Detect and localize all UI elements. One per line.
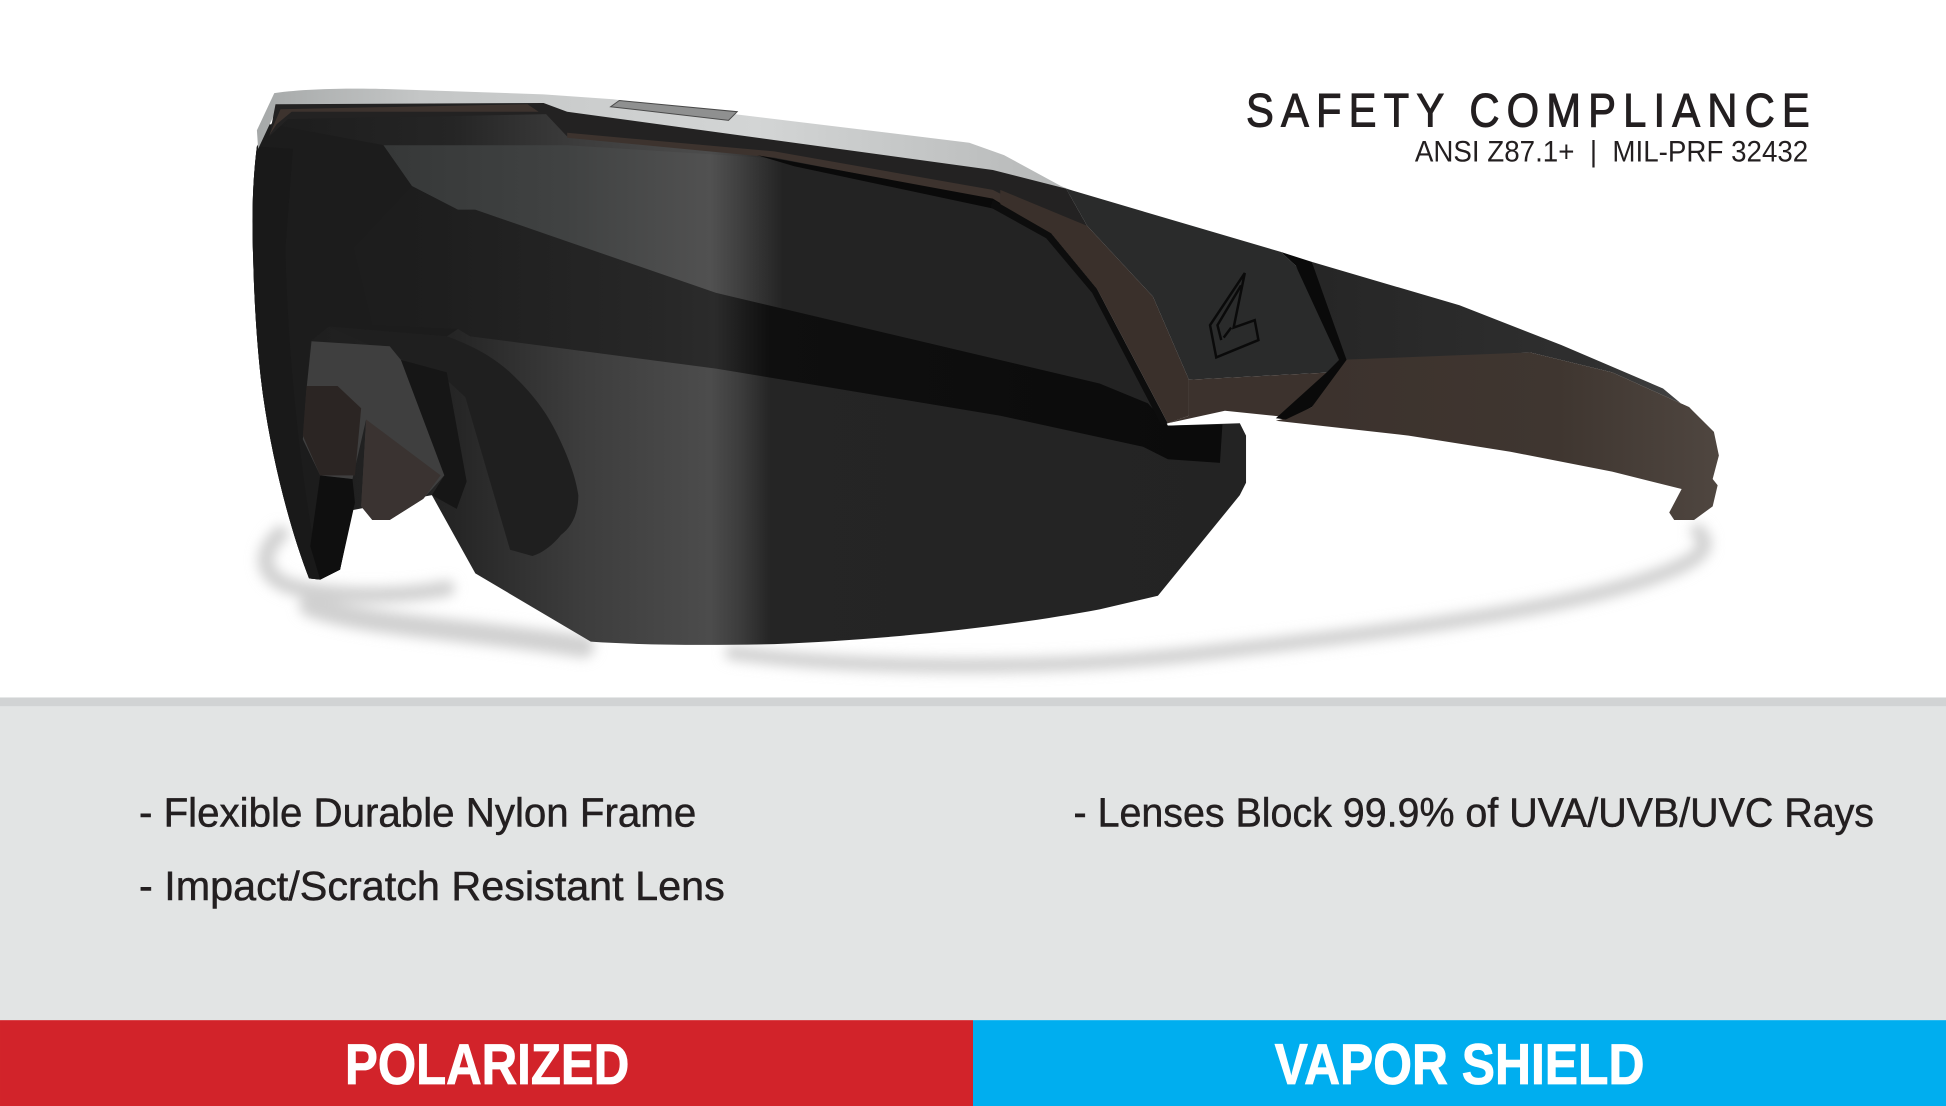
lens tip black [310, 475, 355, 580]
brown lower block [1168, 372, 1332, 423]
badge: polarized: POLARIZED [345, 1033, 629, 1097]
frame black upper [269, 103, 1087, 233]
temple hinge stripe [1276, 252, 1347, 419]
top vent [611, 101, 737, 120]
icon: side logo [1210, 273, 1258, 357]
badge: vapor shield [973, 1020, 1946, 1106]
feature: UV blocking: - Lenses Block 99.9% of UVA/UVB/UVC Rays [1074, 790, 1874, 836]
title: safety compliance: SAFETY COMPLIANCE [1246, 84, 1817, 137]
lens upper right tint [767, 149, 1148, 403]
panel: features background [0, 697, 1946, 1020]
frame top highlight [257, 89, 1092, 199]
lens left edge shading [252, 146, 320, 580]
feature: scratch resistant lens: - Impact/Scratch Resistant Lens [139, 863, 725, 909]
panel top band [0, 697, 1946, 706]
lens pad shadow [329, 326, 578, 556]
subtitle: standards: ANSI Z87.1+ | MIL-PRF 32432 [1415, 135, 1808, 168]
illustration: safety glasses [252, 89, 1719, 645]
nose pad outer [303, 341, 444, 520]
badge: vapor shield: VAPOR SHIELD [1275, 1033, 1644, 1097]
frame brown accent left [269, 104, 539, 135]
badge: polarized [0, 1020, 973, 1106]
side panel [1066, 189, 1347, 380]
temple lower [1276, 352, 1719, 520]
lens silhouette [252, 112, 1246, 645]
frame brown wrap [1000, 190, 1189, 423]
nose pad inner [303, 386, 361, 475]
lens reflection dark band [354, 186, 1222, 463]
lens upper left dark area [252, 124, 490, 580]
icon: ground shadow of glasses [266, 531, 1704, 666]
temple upper [1312, 262, 1700, 419]
nose pad lower [361, 419, 441, 520]
lens upper reflection [383, 145, 782, 310]
frame black wedge under accent [757, 155, 1050, 233]
frame black lens edge [990, 200, 1168, 426]
feature: nylon frame: - Flexible Durable Nylon Frame [139, 790, 696, 836]
frame brown accent top [567, 133, 1097, 289]
nose strip shadow [401, 360, 467, 509]
